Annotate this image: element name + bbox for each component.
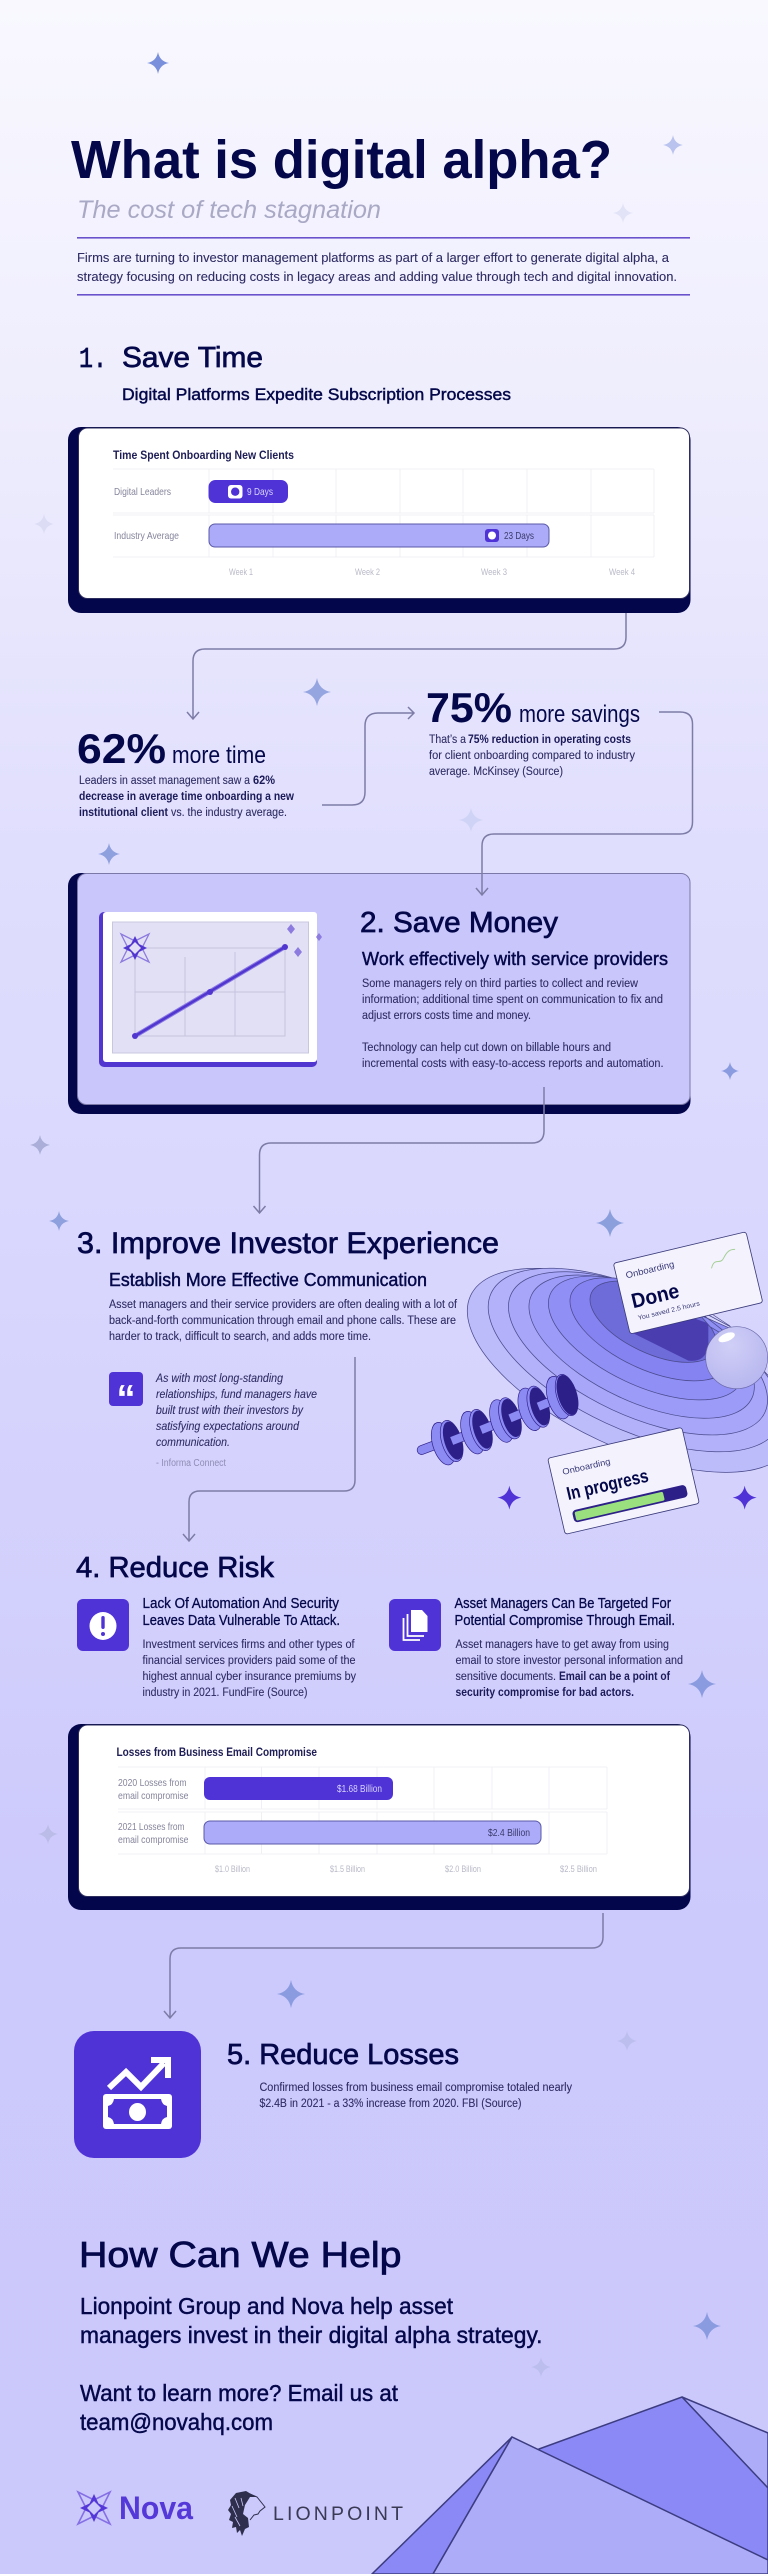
stat: 62% more time: 62% [253,773,275,787]
body text [362,976,664,1070]
arrow: save money to investor experience [254,1087,544,1213]
risk text: asset managers targeted: Potential Compromise Through Email. [454,1612,675,1629]
bar: industry average 23 days [209,524,549,547]
quote text: built trust with their investors by [156,1403,304,1417]
reduce losses text: $2.4B in 2021 - a 33% increase from 2020. FBI (Source) [260,2096,522,2110]
bar: 2021 losses: $2.4 Billion [488,1827,530,1839]
bar: 2020 losses [204,1777,393,1800]
body text: incremental costs with easy-to-access reports and automation. [362,1056,664,1070]
icon: quote: “ [116,1378,136,1420]
arrow: investor experience to reduce risk [183,1357,355,1541]
chart title: Time Spent Onboarding New Clients [113,448,294,462]
risk text: lack of automation: Leaves Data Vulnerable To Attack. [142,1612,340,1629]
illustration: rings, cards and planet [422,1226,768,1534]
arrow: 62 percent to 75 percent [322,707,414,805]
card: onboarding done [613,1232,763,1334]
icon: documents [389,1599,441,1651]
stat: 62% more time: institutional client [79,805,168,819]
stat: 75% more savings: That’s a [429,732,466,746]
body text: information; additional time spent on communication to fix and [362,992,663,1006]
chart title: Losses from Business Email Compromise [116,1745,317,1759]
stat: 62% more time: Leaders in asset management saw a [79,773,250,787]
help text [80,2293,542,2435]
risk text: lack of automation: industry in 2021. FundFire (Source) [142,1685,308,1699]
investor experience text: Asset managers and their service providers are often dealing with a lot of [109,1297,457,1311]
help text: managers invest in their digital alpha strategy. [80,2322,542,2348]
stat: 62% more time: vs. the industry average. [171,805,287,819]
bar: digital leaders 9 days [208,480,288,503]
row labels [118,1777,189,1846]
stat: 75% more savings: 75% [426,684,512,731]
risk text: lack of automation [142,1595,357,1699]
quote text [155,1371,317,1469]
risk text: asset managers targeted [454,1595,683,1699]
heading: how can we help: How Can We Help [79,2234,402,2275]
concentric rings [438,1226,768,1514]
quote text: relationships, fund managers have [156,1387,317,1401]
heading: 1. Save Time: 1. [79,343,107,376]
card: onboarding in progress [548,1427,699,1534]
stat: 75% more savings [426,684,640,778]
body text: adjust errors costs time and money. [362,1008,531,1022]
quote text: satisfying expectations around [156,1419,300,1433]
billion axis [215,1864,597,1875]
bar: 2021 losses [204,1821,541,1844]
investor experience text: harder to track, difficult to search, and adds more time. [109,1329,371,1343]
row labels: Industry Average [114,530,179,542]
risk text: asset managers targeted: Asset Managers Can Be Targeted For [454,1595,671,1612]
billion axis: $1.0 Billion [215,1864,250,1875]
subtitle: The cost of tech stagnation [77,196,381,224]
week axis: Week 4 [609,567,635,578]
week axis [229,567,635,578]
heading: 1. Save Time: Save Time [122,342,263,374]
body text: Technology can help cut down on billable hours and [362,1040,611,1054]
logo: Nova: Nova [119,2490,193,2526]
quote text: As with most long-standing [155,1371,283,1385]
billion axis: $2.5 Billion [560,1864,597,1875]
card: onboarding in progress: Onboarding [561,1456,612,1477]
icon: quote [109,1372,143,1420]
intro text block: Firms are turning to investor management platforms as part of a larger effort to generate digital alpha, a [77,250,670,265]
row labels: Digital Leaders [114,486,171,498]
investor experience text: back-and-forth communication through email and phone calls. These are [109,1313,456,1327]
reduce losses text: Confirmed losses from business email compromise totaled nearly [260,2080,573,2094]
logo: Lionpoint: LIONPOINT [273,2503,403,2525]
panel: save money [68,873,690,1114]
heading: 5. Reduce Losses: 5. Reduce Losses [227,2039,459,2071]
risk text: asset managers targeted: Email can be a point of [559,1669,671,1683]
stat: 75% more savings: average. McKinsey (Source) [429,764,563,778]
card: onboarding done: Onboarding [625,1259,675,1280]
arrow: losses chart to reduce losses [164,1913,603,2018]
row labels: email compromise [118,1834,189,1846]
help text: team@novahq.com [80,2409,273,2435]
subheading: digital platforms: Digital Platforms Expedite Subscription Processes [122,385,511,404]
risk text: asset managers targeted: security compromise for bad actors. [456,1685,634,1699]
row labels: email compromise [118,1790,189,1802]
panel: onboarding chart card [68,427,690,613]
purple stars [497,1486,757,1510]
bar: digital leaders 9 days: 9 Days [247,486,273,498]
billion axis: $2.0 Billion [445,1864,481,1875]
line chart illustration [99,912,322,1067]
card: onboarding done: You saved 2.5 hours [637,1300,701,1322]
body text: Some managers rely on third parties to collect and review [362,976,638,990]
billion axis: $1.5 Billion [330,1864,365,1875]
risk text: lack of automation: Lack Of Automation And Security [142,1595,339,1612]
spine object [422,1372,582,1468]
risk text: lack of automation: Investment services firms and other types of [142,1637,355,1651]
heading: 2. Save Money: 2. Save Money [360,907,559,939]
arrow: card to 62 percent [187,613,626,719]
card: onboarding done: Done [629,1280,681,1313]
chart grid [118,1767,607,1854]
stat: 62% more time: decrease in average time onboarding a new [79,789,294,803]
logo: Lionpoint [228,2491,403,2536]
week axis: Week 2 [355,567,380,578]
subheading: service providers: Work effectively with service providers [362,949,668,969]
risk text: asset managers targeted: sensitive documents. [456,1669,556,1683]
card: onboarding in progress: In progress [564,1465,650,1504]
risk text: lack of automation: financial services providers paid some of the [142,1653,356,1667]
intro text block [77,237,690,296]
stat: 62% more time: 62% [77,725,166,772]
help text: Lionpoint Group and Nova help asset [80,2293,454,2319]
row labels: 2020 Losses from [118,1777,187,1789]
row labels [114,486,179,542]
stat: 75% more savings: for client onboarding compared to industry [429,748,636,762]
stat: 62% more time [77,725,294,819]
help text: Want to learn more? Email us at [80,2380,399,2406]
quote text: communication. [156,1435,230,1449]
title: What is digital alpha? [71,130,612,190]
stat: 62% more time: more time [172,742,266,769]
stat: 75% more savings: 75% reduction in operating costs [468,732,631,746]
row labels: 2021 Losses from [118,1821,185,1833]
quote text: - Informa Connect [156,1458,226,1469]
bar: 2020 losses: $1.68 Billion [337,1783,382,1795]
risk text: asset managers targeted: email to store investor personal information and [456,1653,683,1667]
intro text block: strategy focusing on reducing costs in legacy areas and adding value through tech and digital innovation. [77,269,677,284]
week axis: Week 1 [229,567,253,578]
investor experience text [109,1297,457,1343]
risk text: asset managers targeted: Asset managers have to get away from using [456,1637,669,1651]
panel: losses chart card [68,1724,690,1910]
subheading: communication: Establish More Effective Communication [109,1270,427,1290]
icon: money with rising chart [74,2031,201,2158]
icon: alert [77,1599,129,1651]
heading: 3. Improve Investor Experience: 3. Improve Investor Experience [77,1227,499,1260]
heading: 4. Reduce Risk: 4. Reduce Risk [76,1552,274,1584]
mountains [372,2397,768,2574]
bar: industry average 23 days: 23 Days [504,530,534,542]
reduce losses text [260,2080,573,2110]
arrow: 75 percent to save money [476,712,692,895]
logo: Nova [78,2490,193,2526]
chart grid [113,469,654,557]
stat: 75% more savings: more savings [519,701,640,728]
risk text: lack of automation: highest annual cyber insurance premiums by [142,1669,357,1683]
week axis: Week 3 [481,567,507,578]
planet sphere [706,1327,768,1389]
